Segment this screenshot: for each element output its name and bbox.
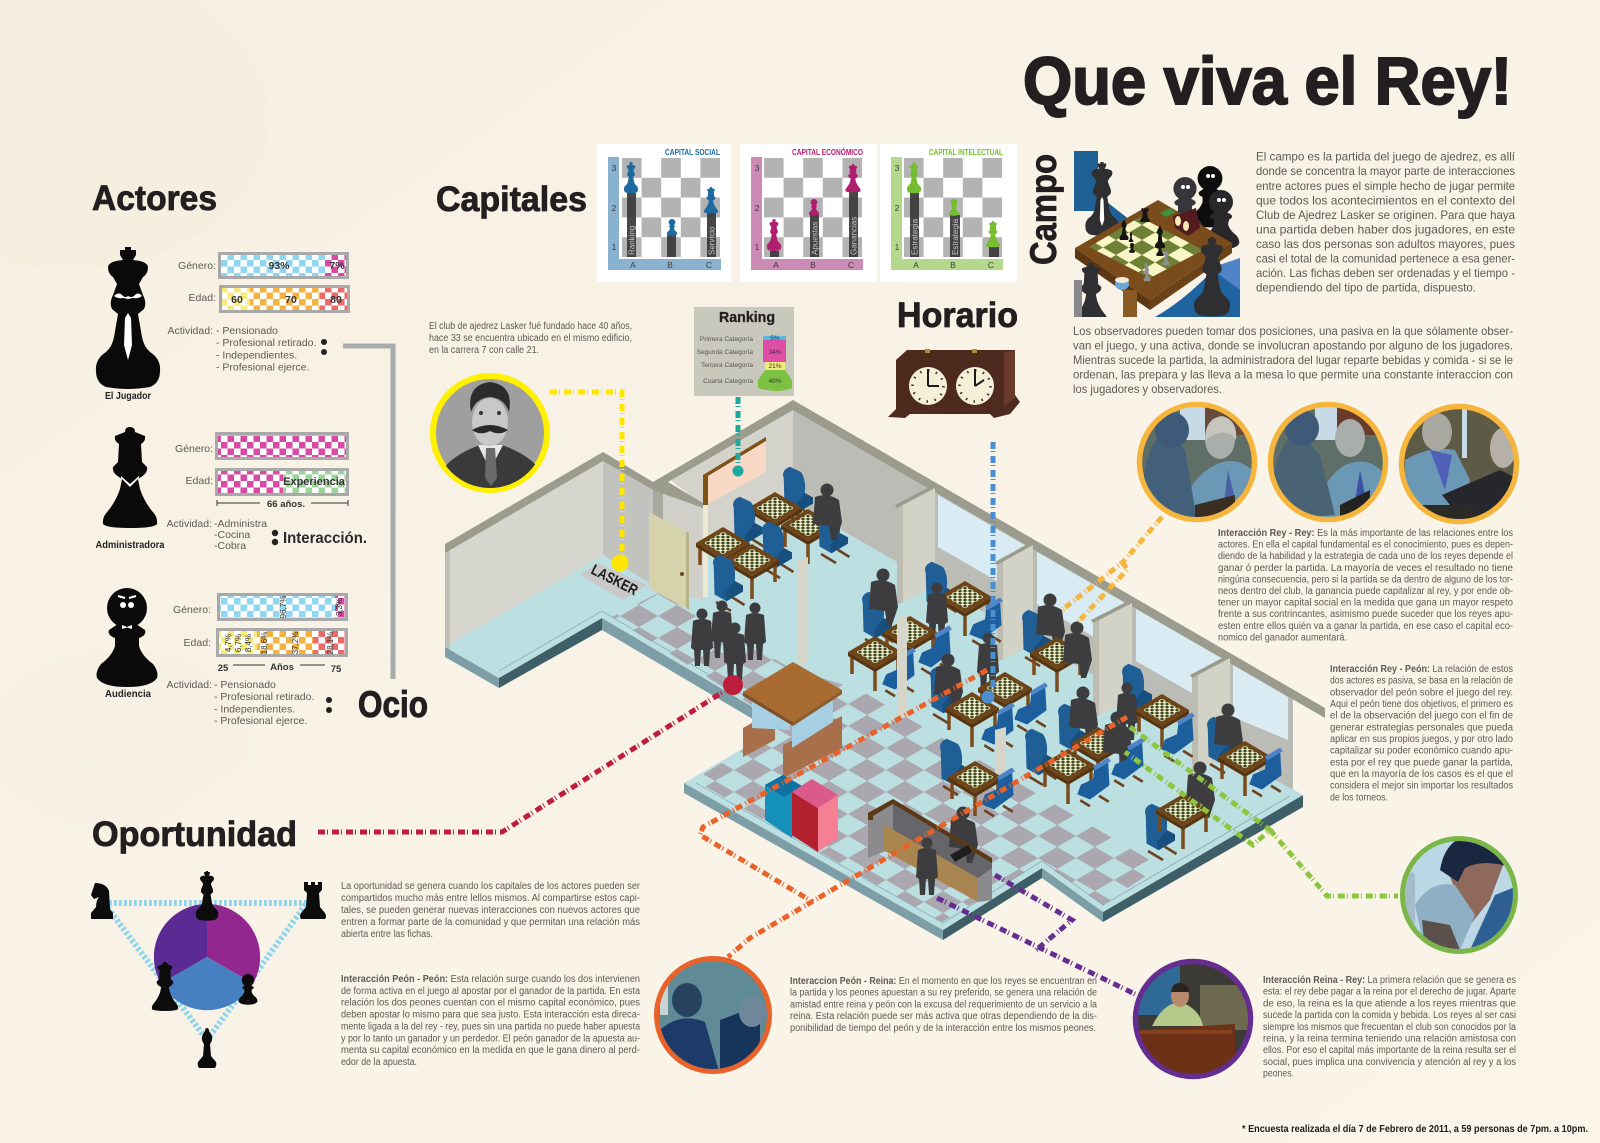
column labels: Estrategia (951, 218, 960, 255)
capital pie (154, 904, 260, 1010)
rook chart (758, 335, 792, 391)
bar: genero (175, 434, 348, 458)
text: campo paragraph 1: una partida deben haber dos jugadores, en este (1256, 222, 1515, 236)
column labels (628, 226, 716, 255)
text: interaccion rey peon: el de la observación del juego con el fin de (1330, 711, 1513, 722)
text: actividad: - Independientes. (216, 350, 297, 362)
axis labels: B (950, 260, 956, 270)
axis: anos: Años (270, 662, 294, 673)
axis: anos: 75 (331, 664, 342, 675)
text: campo paragraph 1: ación. Las fichas deben ser ordenadas y el tiempo - (1256, 266, 1515, 280)
axis: anos (218, 662, 342, 675)
axis labels: C (706, 260, 712, 270)
text: interaccion rey rey: ganar ó perder la partida. La mayoría de veces el resultado no tiene (1218, 563, 1513, 574)
connector: teal (732, 397, 744, 476)
pieces (767, 164, 861, 251)
text: actividad: - Profesional retirado. (216, 337, 316, 349)
text: interaccion reina rey: peones. (1263, 1069, 1294, 1080)
text: campo paragraph 1: El campo es la partida del juego de ajedrez, es allí (1256, 150, 1516, 164)
heading: Horario: Horario (897, 296, 1018, 335)
column labels: Ganancias (850, 217, 858, 255)
text: interaccion rey peon: capitalizar su poder económico cuando apu- (1330, 746, 1513, 757)
text: campo paragraph 1: casi el total de la comunidad pertenece a esa gener- (1256, 252, 1515, 266)
axis labels: 3 (895, 163, 900, 173)
text: interaccion rey rey: diendo de la habilidad y la estrategia de cada uno de los reyes depende el (1218, 551, 1513, 562)
text: interaccion peon reina: la partida y los peones apuestan a su rey preferido, se genera una relación de (790, 988, 1097, 999)
text: actividad: Actividad: (166, 679, 212, 691)
rook chart: 40% (768, 378, 782, 385)
reception kiosk (743, 662, 842, 778)
axis labels: A (913, 260, 919, 270)
text: oportunidad intro: La oportunidad se genera cuando los capitales de los actores pueden ser (341, 881, 641, 892)
text: actividad (166, 679, 314, 727)
icon: queen piece (103, 427, 157, 528)
text: actividad: -Cobra (214, 540, 246, 552)
category labels: Tercera Categoría (701, 362, 753, 369)
connector: blue (982, 442, 994, 704)
axis: anos: 25 (218, 663, 229, 674)
text: interaccion peon peon: deben apostar lo mismo para que sea justo. Esta interacción esta direca- (341, 1010, 640, 1021)
panel: capital economico (740, 144, 877, 282)
bar: genero: 96,7% (279, 596, 288, 618)
bar: edad: 8,4% (244, 634, 253, 652)
dining area back tables (696, 467, 850, 611)
icon: colon dots (321, 339, 327, 355)
text: campo paragraph 1: entre actores pues el simple hecho de jugar permite (1256, 179, 1515, 193)
text: interaccion peon peon: de forma activa en el juego al apostar por el ganador de la partida. En esta (341, 986, 640, 997)
axis labels (895, 163, 994, 270)
text: club intro: en la carrera 7 con calle 21. (429, 345, 539, 356)
text: interaccion peon peon: edor de la apuesta. (341, 1057, 417, 1068)
columns (627, 193, 716, 257)
text: interaccion rey rey: tener un mayor capital social en la medida que gana un mayor respeto (1218, 598, 1513, 609)
board (608, 157, 721, 270)
bar: genero: Género: (178, 260, 216, 272)
panel: capital intelectual (880, 144, 1017, 282)
text: interaccion reina rey: siempre los mismos que frecuentan el club son conocidos por la (1263, 1022, 1516, 1033)
text: interaccion reina rey: sucede la partida con la comida y bebida. Los reyes al ser casi (1263, 1010, 1516, 1021)
connector: red (318, 675, 743, 832)
axis labels: A (630, 260, 636, 270)
bar: genero (178, 254, 348, 278)
text: interaccion peon peon: mente ligada a la del rey - rey, pues sin una partida no puede haber apuesta (341, 1021, 640, 1032)
text: campo paragraph 1: donde se concentra la mayor parte de interacciones (1256, 164, 1515, 178)
text: campo paragraph 2: los jugadores y observadores. (1073, 382, 1222, 396)
bar: edad: 28,1% (326, 632, 335, 654)
board title: CAPITAL INTELECTUAL (929, 148, 1003, 157)
column labels: Servicio (708, 226, 716, 255)
bar: edad (186, 470, 348, 494)
text: interaccion rey rey: neos dentro del club, la ganancia puede capitalizar al rey, y por ende ob- (1218, 586, 1513, 597)
title: Que viva el Rey! (1023, 44, 1512, 119)
dimension: 66 anos: 66 años. (267, 499, 305, 510)
pieces (907, 162, 1000, 247)
column labels: Apuestas (810, 222, 820, 255)
photo: rey peon (1402, 835, 1520, 952)
rook chart: 5% (770, 335, 780, 342)
text: campo paragraph 2: Los observadores pueden tomar dos posiciones, una pasiva en la que sólamente obser- (1073, 324, 1513, 338)
label: Audiencia: Audiencia (105, 689, 151, 700)
axis labels: 3 (755, 163, 760, 173)
floor plinth (445, 618, 1303, 940)
axis labels: C (848, 260, 854, 270)
text: interaccion rey rey: Interacción Rey - Rey: Es la más importante de las relaciones entre los (1218, 528, 1513, 539)
panel: ranking (694, 307, 794, 396)
label: Administradora: Administradora (96, 540, 165, 551)
bar: genero: Género: (173, 604, 211, 616)
axis labels: B (667, 260, 673, 270)
text: interaccion rey rey: nomico del ganador aumentará. (1218, 632, 1347, 643)
doormat: LASKER: LASKER (588, 561, 641, 599)
text: interaccion peon peon: relación los dos peones cuentan con el mismo capital económico, pues (341, 998, 640, 1009)
columns (910, 193, 999, 257)
column labels (910, 218, 960, 255)
blue and red boxes (765, 775, 838, 852)
connector: purple (937, 875, 1137, 995)
floor surface (445, 502, 1303, 930)
text: actividad: - Independientes. (214, 704, 295, 716)
text: campo paragraph 2: Mientras sucede la partida, la administradora del lugar reparte bebidas y comida - si se le (1073, 353, 1513, 367)
text: interaccion peon reina: ponibilidad de tiempo del peón y de la interacción entre los mismos peones. (790, 1023, 1096, 1034)
category labels (697, 336, 753, 385)
heading: Campo rotated: Campo (1023, 154, 1064, 265)
column labels: Ranking (628, 226, 636, 255)
text: campo paragraph 2: ordenan, las prepara y las lleva a la mesa lo que permite una constante interaccion con (1073, 368, 1513, 382)
panel: actor queen (96, 427, 367, 552)
icon: pawn piece (96, 588, 158, 687)
illustration: campo game scene (1074, 151, 1240, 324)
board title: CAPITAL ECONÓMICO (792, 148, 863, 157)
service counter (868, 799, 992, 902)
text: actividad: - Pensionado (214, 679, 276, 691)
text: campo paragraph 2: van el juego, y una activa, donde se involucran apostando por alguno de los jugadores. (1073, 338, 1513, 352)
columns (770, 192, 858, 257)
column labels (810, 217, 858, 255)
board title: CAPITAL SOCIAL (665, 148, 720, 157)
roof caps (445, 400, 1325, 718)
pieces (91, 871, 326, 1068)
photo: reina rey (1135, 962, 1250, 1080)
text: actividad: Actividad: (166, 518, 212, 530)
text: interaccion reina rey (1263, 975, 1516, 1080)
text: interaccion rey peon: dos actores es pasiva, se basa en la relación de (1330, 676, 1513, 687)
photo: Lasker portrait (433, 376, 547, 490)
text: interaccion rey rey: ningúna consecuencia, pero si la partida se da dentro de alguno de los tor- (1218, 574, 1513, 585)
text: club intro (429, 321, 632, 356)
axis labels: C (988, 260, 994, 270)
icon: colon dots (326, 697, 332, 713)
text: oportunidad intro: entren a formar parte de la comunidad y que permitan una relación más (341, 917, 640, 928)
text: campo paragraph 1: caso las dos personas son adultos mayores, pues (1256, 237, 1515, 251)
text: interaccion peon peon (341, 974, 640, 1068)
text: interaccion reina rey: social, pues implica una convivencia y atención al rey y a los (1263, 1057, 1516, 1068)
bar: genero (173, 594, 346, 620)
axis labels: 2 (755, 203, 760, 213)
text: interaccion reina rey: Interacción Reina - Rey: La primera relación que se genera es (1263, 975, 1516, 986)
board (891, 157, 1003, 270)
text: actividad: -Administra (214, 518, 267, 530)
floor rim line (499, 611, 1290, 923)
photo: peon reina (656, 958, 770, 1075)
pillar (798, 557, 808, 666)
text: actividad (167, 325, 316, 374)
axis labels: B (810, 260, 816, 270)
pieces (624, 162, 718, 236)
text: actividad: -Cocina (214, 529, 250, 541)
room tables and players back to front (848, 562, 1283, 860)
bar: edad (189, 286, 348, 312)
text: oportunidad intro: compartidos mucho más entre lellos mismos. Al compartirse estos capi- (341, 893, 640, 904)
text: interaccion rey peon (1330, 664, 1513, 803)
text: interaccion peon reina: reina. Esta relación puede ser más activa que otras dependiendo de la dis- (790, 1011, 1097, 1022)
rook chart: 21% (768, 363, 782, 370)
photo: players 2 (1268, 404, 1387, 520)
axis labels: 1 (755, 242, 760, 252)
text: interaccion reina rey: ellos. Por eso el capital más importante de la reina resulta ser el (1263, 1045, 1516, 1056)
text: interaccion peon reina: amistad entre reina y peón con la excusa del requerimiento de un servicio a la (790, 999, 1097, 1010)
text: interaccion rey peon: que en la mayoría de los casos es el que el (1330, 769, 1513, 780)
bar: edad: Edad: (186, 475, 213, 487)
text: interaccion rey peon: observador del peón sobre el juego del rey. (1330, 687, 1513, 698)
bar: edad: 70 (285, 294, 297, 306)
panel: actor king (96, 247, 348, 402)
category labels: Cuarta Categoría (703, 378, 753, 385)
connector: ocio bracket (343, 346, 393, 679)
bar: edad: Edad: (189, 292, 216, 304)
bar: edad: Edad: (184, 637, 211, 649)
text: interaccion peon peon: y por lo tanto un ganador y un perdedor. El peón ganador de la apuesta au- (341, 1033, 640, 1044)
category labels: Segunda Categoría (697, 349, 753, 356)
bar: genero: 7% (329, 260, 345, 272)
standing group (691, 600, 766, 680)
far walls (445, 405, 1293, 790)
text: campo paragraph 1: Club de Ajedrez Lasker se originen. Para que haya (1256, 208, 1515, 222)
diagram: oportunidad triangle (91, 871, 326, 1068)
text: actividad: - Profesional retirado. (214, 691, 314, 703)
text: club intro: El club de ajedrez Lasker fué fundado hace 40 años, (429, 321, 632, 332)
bar: edad: 37,2% (291, 632, 300, 654)
triangle connectors (104, 903, 307, 1040)
category labels: Primera Categoría (700, 336, 753, 343)
text: actividad (166, 518, 267, 552)
dimension: 66 anos (217, 499, 348, 510)
text: interaccion peon reina: Interaccion Peón - Reina: En el momento en que los reyes se encuentran en (790, 976, 1097, 987)
photo: players 3 (1402, 406, 1516, 522)
axis labels: 1 (612, 242, 617, 252)
label: Interaccion: Interacción. (283, 530, 367, 547)
text: club intro: hace 33 se encuentra ubicado en el mismo edificio, (429, 333, 632, 344)
text: interaccion rey peon: considera el mejor sin importar los resultados (1330, 781, 1513, 792)
bar: genero: 93% (268, 260, 290, 272)
bar: genero: 3,3% (335, 598, 344, 616)
text: oportunidad intro: tales, se pueden generar nuevas interacciones con nuevos actores que (341, 905, 640, 916)
heading: Actores: Actores (92, 179, 217, 218)
axis labels (612, 163, 712, 270)
axis labels: 2 (612, 203, 617, 213)
heading: Capitales: Capitales (436, 180, 587, 219)
heading: Ocio: Ocio (358, 684, 428, 725)
illustration: isometric chess club floor plan (445, 400, 1325, 940)
text: interaccion rey peon: Aqui el peón tiene dos objetivos, el primero es (1330, 699, 1513, 710)
connector: green (1125, 727, 1398, 896)
text: interaccion rey rey: frente a sus contrincantes, asimismo puede suceder que los reyes apu- (1218, 609, 1513, 620)
bar: edad: Experiencia (283, 476, 346, 488)
icon: chess clock (888, 349, 1020, 418)
text: interaccion rey peon: generar estrategias personales que pueda (1330, 722, 1513, 733)
windows (938, 495, 1288, 740)
door (649, 512, 689, 610)
axis labels: A (773, 260, 779, 270)
text: actividad: - Profesional ejerce. (216, 362, 309, 374)
text: actividad: Actividad: (167, 325, 213, 337)
axis labels: 1 (895, 242, 900, 252)
bar: genero: Género: (175, 443, 213, 455)
text: campo paragraph 2 (1073, 324, 1513, 396)
panel: capital social (597, 144, 731, 282)
text: interaccion rey rey (1218, 528, 1513, 643)
connector: orange (700, 670, 1127, 957)
bar: edad: 6,7% (234, 634, 243, 652)
panel: actor pawn (96, 588, 428, 727)
text: interaccion peon reina (790, 976, 1097, 1034)
text: interaccion peon peon: Interacción Peón - Peón: Esta relación surge cuando los dos intervienen (341, 974, 640, 985)
label: El Jugador: El Jugador (105, 391, 151, 402)
text: interaccion rey peon: aplicar en sus propios juegos, y por otro lado (1330, 734, 1513, 745)
text: interaccion rey rey: actores. En ella el capital fundamental es el conocimiento, pues es depen- (1218, 540, 1513, 551)
axis labels: 3 (612, 163, 617, 173)
bar: edad: 80 (330, 294, 342, 306)
photo: players 1 (1140, 404, 1255, 520)
text: actividad: - Profesional ejerce. (214, 715, 307, 727)
text: interaccion peon peon: menta su capital económico en la medida en que le gana dinero al perd- (341, 1045, 640, 1056)
text: interaccion rey rey: esten entre ellos quién va a ganar la partida, en ese caso el capital eco- (1218, 621, 1513, 632)
text: interaccion rey peon: esta por el rey que puede ganar la partida, (1330, 757, 1513, 768)
heading: Ranking: Ranking (719, 310, 775, 326)
text: interaccion reina rey: reina, y la reina termina teniendo una relación amistosa con (1263, 1034, 1516, 1044)
rook chart: 34% (768, 349, 782, 356)
connector: gold (1062, 517, 1162, 623)
floor checker tiles (612, 592, 1160, 922)
icon: king piece (96, 247, 160, 389)
bar: edad: 60 (231, 294, 243, 306)
bar: edad (184, 630, 346, 656)
bar: edad: 4,7% (224, 634, 233, 652)
text: actividad: - Pensionado (216, 325, 278, 337)
text: interaccion rey peon: Interacción Rey - Peón: La relación de estos (1330, 664, 1513, 675)
heading: Oportunidad: Oportunidad (92, 815, 297, 854)
text: interaccion reina rey: de eso, la reina es la que atiende a los reyes mientras que (1263, 998, 1516, 1009)
board (751, 157, 863, 270)
column labels: Estrategia (910, 218, 920, 255)
text: interaccion reina rey: esta: el rey debe pagar a la reina por el derecho de jugar. Aparte (1263, 987, 1516, 998)
text: campo paragraph 1: dependiendo del tipo de partida, dispuesto. (1256, 281, 1476, 295)
wall board (703, 437, 766, 597)
axis labels: 2 (895, 203, 900, 213)
text: campo paragraph 1 (1256, 150, 1516, 295)
connector: yellow (550, 392, 628, 572)
text: campo paragraph 1: que todos los acontecimientos en el contexto del (1256, 193, 1515, 207)
icon: colon dots (272, 530, 278, 545)
bar: edad: 18,6% (260, 632, 269, 654)
text: oportunidad intro: abierta entre las fichas. (341, 929, 433, 940)
axis labels (755, 163, 854, 270)
partitions (895, 484, 1230, 773)
text: oportunidad intro (341, 881, 641, 940)
text: interaccion rey peon: de los torneos. (1330, 792, 1388, 803)
